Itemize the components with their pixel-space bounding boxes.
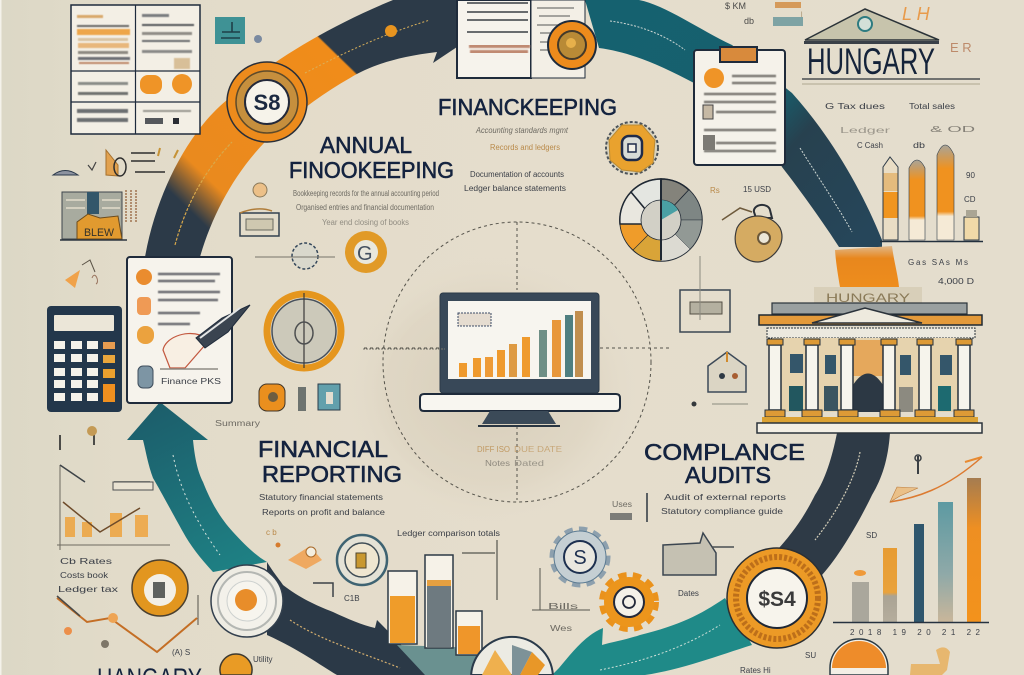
note: right text block: Total sales (909, 102, 955, 111)
dome: bottom right: Rates Hi (740, 666, 771, 675)
centre captions (477, 445, 562, 468)
note: right text block: C Cash (857, 141, 883, 150)
arrow: annual bookkeeping arc (145, 0, 457, 257)
icon: audit badge (606, 122, 658, 174)
heading: financial reporting (215, 419, 402, 517)
caption lines: Records and ledgers (490, 143, 560, 152)
caption lines: Summary (215, 419, 260, 428)
heading: financial bookkeeping (438, 94, 617, 193)
arrow: financial reporting arc (127, 402, 267, 572)
note: right text block (825, 102, 976, 150)
gear: S: S (573, 547, 587, 569)
caption lines (464, 126, 569, 193)
sign: Hungary temple (802, 9, 980, 84)
heading: Hungary clipped: Utility (253, 655, 273, 664)
heading: compliance audits (610, 439, 805, 522)
caption lines: Statutory compliance guide (661, 507, 784, 516)
circle marker: bottom left (211, 565, 283, 637)
circle marker: teal ring: c b (266, 528, 277, 537)
heading: annual bookkeeping: FINOOKEEPING (289, 157, 454, 183)
bar chart: bottom centre (388, 529, 500, 655)
line chart: upper left: Ledger tax (58, 585, 118, 594)
note: right text block: db (913, 141, 926, 150)
icons: row under annual heading (240, 183, 387, 273)
icon: gold seal with chain (710, 185, 782, 262)
building: parliament (757, 287, 982, 433)
panel: top-left ledger sheet (71, 5, 200, 134)
coin: top centre (548, 21, 596, 69)
coin: left (132, 560, 188, 616)
pie dial: bottom centre (471, 637, 553, 675)
bar chart: top right: 4,000 D (938, 277, 974, 286)
trend line: bottom right (890, 455, 982, 502)
caption lines: Ledger balance statements (464, 184, 566, 193)
icon: teal note top (215, 17, 262, 44)
caption lines: Audit of external reports (664, 493, 786, 502)
panel: left clipboard: Finance PKS (161, 377, 221, 386)
arrow: financial bookkeeping arc (585, 0, 899, 287)
circle marker: teal ring (266, 528, 387, 603)
plaque: HUNGARY (826, 291, 910, 305)
note: right text block: & OD (930, 125, 976, 134)
heading: compliance audits: AUDITS (685, 462, 771, 488)
bar chart: bottom right (833, 478, 989, 637)
heading: financial bookkeeping: FINANCKEEPING (438, 94, 617, 120)
note: right text block: G Tax dues (825, 102, 885, 111)
icon: calculator (47, 306, 122, 412)
caption lines: Uses (612, 500, 632, 509)
bar chart: bottom right: SD (866, 531, 877, 540)
icon: envelope box: Bills (548, 602, 578, 611)
centre captions: DIFF ISO (477, 445, 510, 454)
note: right text block: Ledger (840, 126, 891, 135)
line chart: upper left (57, 426, 170, 594)
pie chart (620, 179, 702, 261)
heading: financial reporting: FINANCIAL (258, 436, 388, 462)
centre captions: DUE DATE (514, 445, 562, 454)
panel: left clipboard (127, 257, 250, 403)
bar chart: bottom centre: Ledger comparison totals (397, 529, 500, 538)
caption lines: Bookkeeping records for the annual accounting period (293, 189, 439, 198)
icons: row under annual heading: G (357, 243, 373, 265)
monitor bars (459, 311, 583, 377)
columns (769, 345, 970, 410)
note: orange scribbles top right: L H (902, 4, 931, 24)
bar chart: top right: Gas SAs Ms (908, 258, 968, 267)
coin: compliance: $S4 (758, 588, 796, 611)
icons: row under ring (259, 349, 445, 411)
dome: bottom right: SU (805, 651, 816, 660)
heading: annual bookkeeping: ANNUAL (320, 132, 412, 158)
coin: annual bookkeeping: S8 (254, 90, 280, 115)
icon: shield badge (680, 256, 748, 406)
icon: small sketches left (53, 148, 178, 288)
sign: Hungary temple: HUNGARY (807, 41, 935, 82)
arrow: bottom teal arc (552, 598, 752, 675)
heading: compliance audits: COMPLANCE (644, 439, 805, 465)
line chart: lower left: (A) S (172, 648, 190, 657)
icon: envelope box: Dates (678, 589, 699, 598)
windows (789, 354, 952, 412)
gear: S (553, 530, 607, 584)
icon: envelope box: Wes (550, 624, 572, 633)
dome: bottom right (740, 639, 950, 675)
note: orange scribbles top right: E R (950, 40, 972, 55)
gear: C (603, 576, 655, 628)
icon: monitor with chart (420, 293, 620, 426)
heading: financial reporting: REPORTING (262, 461, 402, 487)
bar chart: top right (880, 145, 983, 286)
icon: envelope box (532, 533, 734, 633)
caption lines: Year end closing of books (322, 218, 409, 227)
plaque (814, 287, 922, 305)
caption lines: Accounting standards mgmt (475, 126, 569, 135)
orange transition to building (835, 246, 899, 287)
arrow: compliance audits arc (779, 433, 890, 575)
bar chart: bottom right: 2018 19 20 21 22 (850, 628, 981, 637)
ring gauge (267, 293, 341, 368)
bar chart: top right: CD (964, 195, 976, 204)
caption lines (215, 419, 386, 517)
arrow: bottom navy arc (267, 562, 480, 675)
heading: Hungary clipped (97, 654, 273, 675)
line chart: upper left: Cb Rates (60, 557, 112, 566)
line chart: upper left: Costs book (60, 571, 109, 580)
circle marker: teal ring: C1B (344, 594, 360, 603)
heading: annual bookkeeping (289, 132, 454, 227)
line chart: lower left (57, 595, 198, 657)
note: orange scribbles top right: db (744, 16, 754, 26)
centre captions: Notes (485, 459, 510, 468)
caption lines (293, 189, 439, 227)
centre captions: Dated (514, 459, 544, 468)
caption lines: Documentation of accounts (470, 170, 564, 179)
caption lines (610, 493, 786, 522)
caption lines: Reports on profit and balance (262, 508, 386, 517)
icon: gold seal with chain: Rs (710, 186, 720, 195)
dashed centre circle (364, 222, 672, 502)
note: orange scribbles top right (725, 1, 972, 55)
coin: annual bookkeeping (227, 62, 307, 142)
icon: small bank building left: BLEW (84, 227, 115, 239)
panel: top centre open report (457, 0, 585, 78)
note: orange scribbles top right: | (800, 9, 803, 23)
note: orange scribbles top right: $ KM (725, 1, 746, 11)
icon: small bank building left (60, 190, 136, 240)
caption lines: Organised entries and financial documentation (296, 203, 434, 212)
panel: right clipboard (694, 47, 785, 165)
bar chart: top right: 90 (966, 171, 975, 180)
icon: gold seal with chain: 15 USD (743, 185, 771, 194)
caption lines: Statutory financial statements (259, 493, 383, 502)
coin: compliance (727, 548, 827, 648)
